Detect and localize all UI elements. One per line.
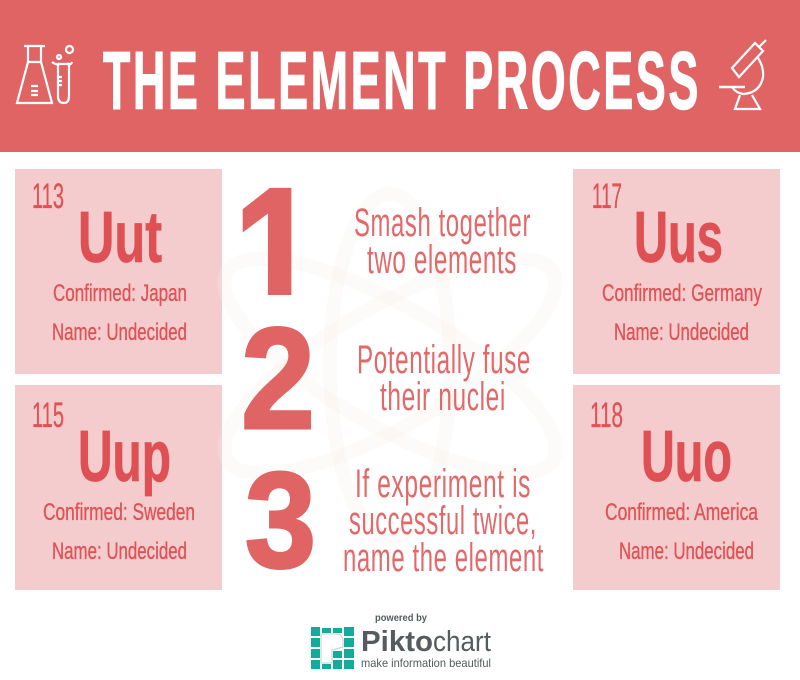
step 2 text: Potentially fuse — [357, 338, 531, 382]
panel: element 113: Uut — [78, 198, 162, 278]
icon: microscope — [719, 40, 766, 109]
panel: element 117: Uus — [634, 198, 723, 278]
step number 2: 2 — [241, 298, 315, 459]
step 2 text: their nuclei — [380, 375, 506, 419]
step 2 text — [357, 338, 531, 419]
step 1 text — [354, 201, 531, 282]
panel: element 115: Uup — [78, 417, 171, 497]
header banner — [0, 0, 800, 152]
panel: element 115: Confirmed: Sweden — [43, 499, 195, 526]
panel: element 115: Name: Undecided — [52, 538, 187, 565]
atom watermark — [197, 194, 583, 538]
panel: element 118: Uuo — [641, 417, 732, 497]
icon: flask and test tube — [17, 46, 73, 103]
step 3 text: successful twice, — [349, 499, 537, 543]
Piktochart footer logo: chart — [433, 626, 491, 658]
step 3 text — [343, 462, 544, 580]
panel: element 117 — [573, 169, 780, 374]
panel: element 117: 117 — [592, 177, 622, 216]
Piktochart footer logo: powered by — [375, 613, 427, 624]
step 3 text: If experiment is — [355, 462, 531, 506]
Piktochart footer logo — [311, 613, 491, 670]
step number 3: 3 — [245, 444, 316, 596]
step 1 text: Smash together — [354, 201, 531, 245]
panel: element 118 — [573, 385, 780, 590]
panel: element 113: Name: Undecided — [52, 319, 187, 346]
step number 1: 1 — [234, 149, 318, 355]
Piktochart footer logo: Pikto — [361, 626, 433, 658]
Piktochart footer logo: make information beautiful — [361, 656, 491, 670]
panel: element 113: Confirmed: Japan — [53, 280, 187, 307]
panel: element 113 — [15, 169, 222, 374]
step 1 text: two elements — [367, 238, 517, 282]
panel: element 115: 115 — [32, 396, 64, 435]
icon: Piktochart tile mark — [311, 627, 354, 669]
panel: element 118: 118 — [590, 396, 623, 435]
panel: element 113: 113 — [32, 177, 64, 216]
step 3 text: name the element — [343, 536, 544, 580]
panel: element 115 — [15, 385, 222, 590]
